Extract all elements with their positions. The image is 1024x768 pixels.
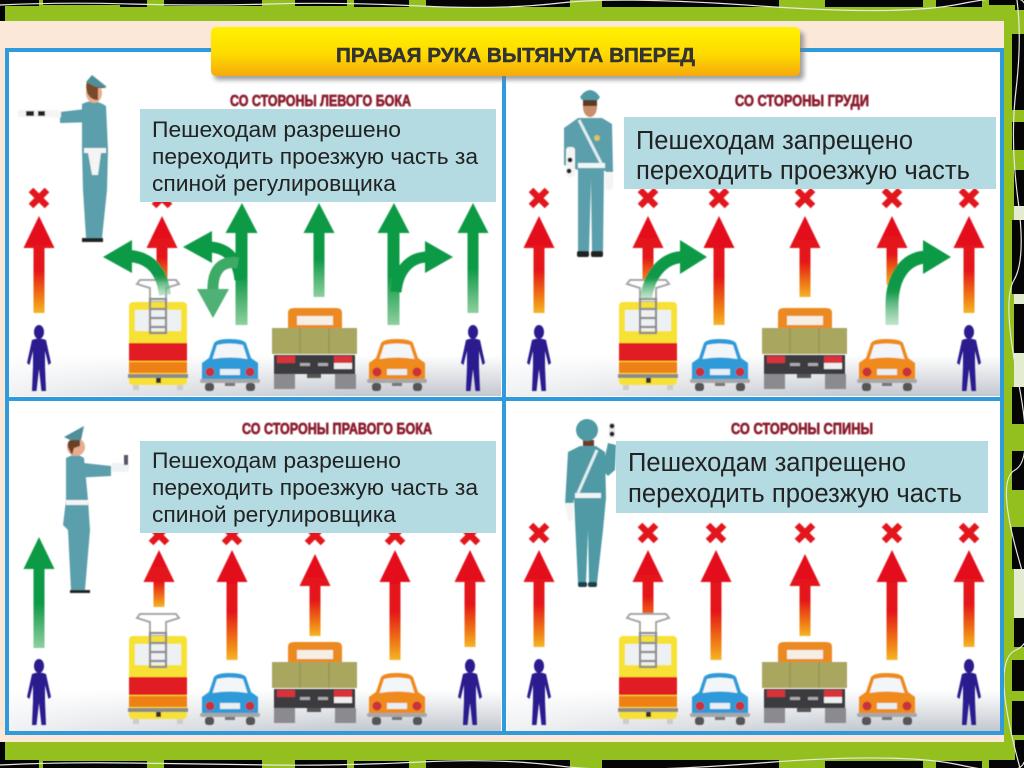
callout: pedestrians forbidden: переходить проезжую часть [628,480,962,508]
callout: pedestrians allowed: спиной регулировщика [152,171,397,196]
panel: right side view [24,421,496,725]
callout: pedestrians allowed [140,441,496,533]
callout: pedestrians allowed: Пешеходам разрешено [152,448,401,473]
panel art: back [524,419,984,725]
callout: pedestrians allowed: Пешеходам разрешено [152,117,401,142]
heading: chest: СО СТОРОНЫ ГРУДИ [735,93,869,110]
title: ПРАВАЯ РУКА ВЫТЯНУТА ВПЕРЕД [336,45,695,67]
callout: pedestrians allowed [140,109,496,202]
callout: pedestrians forbidden [624,117,996,189]
panel art: right side [24,426,486,725]
panel: back view [524,419,988,725]
callout: pedestrians allowed: переходить проезжую часть за [152,144,479,169]
callout: pedestrians forbidden: Пешеходам запрещено [636,127,913,155]
panel: chest view [524,90,996,391]
panel: left side view [18,75,496,391]
panel art: left side [18,75,488,391]
panel art: chest [524,90,984,391]
heading: left side: СО СТОРОНЫ ЛЕВОГО БОКА [230,93,411,110]
callout: pedestrians allowed: переходить проезжую часть за [152,475,479,500]
callout: pedestrians forbidden [616,441,988,513]
heading: back: СО СТОРОНЫ СПИНЫ [731,421,873,438]
callout: pedestrians allowed: спиной регулировщика [152,502,397,527]
callout: pedestrians forbidden: Пешеходам запрещено [628,449,906,477]
pale gaps on right border [1014,206,1024,618]
callout: pedestrians forbidden: переходить проезжую часть [636,157,970,185]
title banner [211,27,804,80]
heading: right side: СО СТОРОНЫ ПРАВОГО БОКА [242,421,432,438]
